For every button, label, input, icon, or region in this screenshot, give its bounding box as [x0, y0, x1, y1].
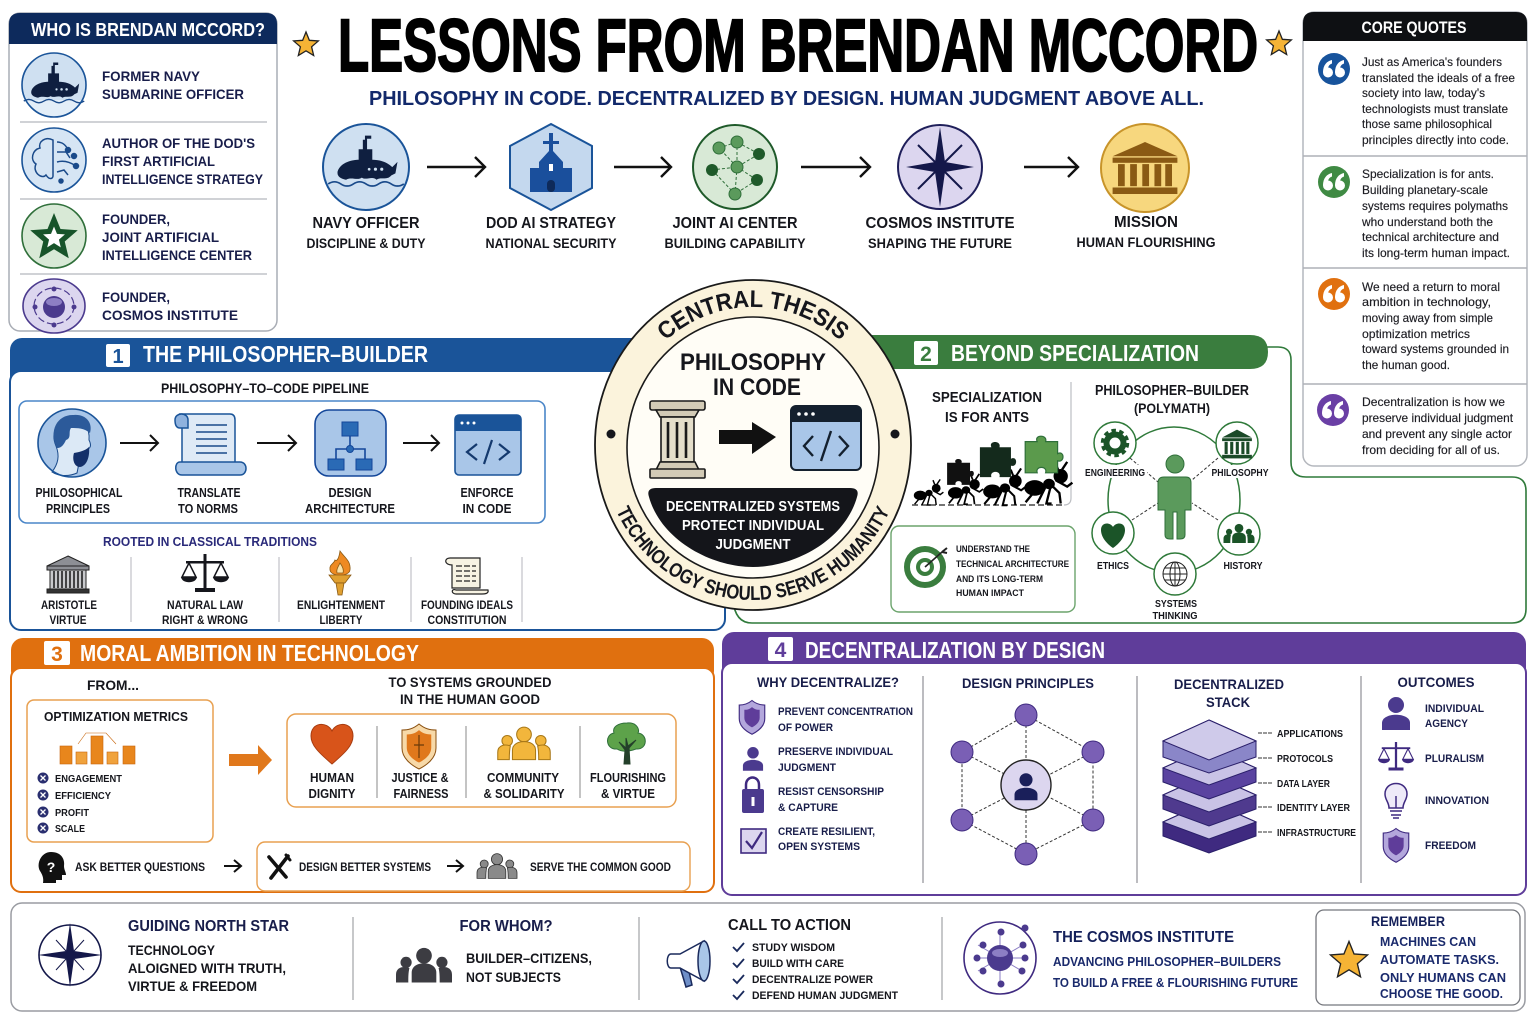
illustration: ants carrying puzzle pieces — [912, 382, 1072, 505]
panel: core quotes — [1303, 12, 1527, 466]
quote 3: the human good. — [1362, 358, 1450, 372]
text: founder JAIC: FOUNDER, — [102, 211, 170, 227]
icon: right star — [1267, 31, 1291, 55]
icon: cosmos planet — [23, 279, 85, 333]
text: preserve judgment — [778, 746, 893, 774]
heading: moral ambition: MORAL AMBITION IN TECHNOLOGY — [80, 640, 419, 666]
icon: green star — [22, 204, 86, 268]
label: cosmos institute: SHAPING THE FUTURE — [868, 235, 1012, 251]
column: design principles — [951, 675, 1104, 865]
badge 3 — [44, 641, 70, 666]
text: author of the DoD's strategy: AUTHOR OF THE DOD'S — [102, 135, 255, 151]
callout: remember — [1316, 910, 1520, 1005]
icon: cosmos institute — [964, 922, 1036, 994]
text: guiding north star: GUIDING NORTH STAR — [128, 918, 289, 935]
label: mission — [1076, 214, 1216, 250]
quote 1: those same philosophical — [1362, 117, 1492, 131]
list: metrics: SCALE — [55, 823, 85, 835]
icon: shield — [402, 724, 436, 769]
text: founder JAIC — [102, 211, 252, 263]
label: joint AI center: BUILDING CAPABILITY — [664, 235, 806, 251]
labels: values: COMMUNITY — [487, 771, 560, 785]
callout: remember: CHOOSE THE GOOD. — [1380, 986, 1503, 1001]
icon: people — [477, 854, 517, 878]
arrow — [614, 157, 671, 177]
badge 3: 3 — [51, 643, 63, 666]
text: to systems grounded: TO SYSTEMS GROUNDED — [388, 674, 552, 690]
text: create resilient — [778, 826, 875, 853]
label: enforce in code — [460, 486, 514, 516]
text: author of the DoD's strategy: INTELLIGENCE STRATEGY — [102, 171, 264, 187]
column: outcomes — [1378, 674, 1489, 862]
labels: values: FAIRNESS — [394, 787, 448, 801]
banner: decentralized systems: DECENTRALIZED SYSTEMS — [666, 498, 840, 515]
box: optimization metrics — [27, 700, 213, 842]
label: translate to norms — [178, 486, 240, 516]
flow box: design and serve: DESIGN BETTER SYSTEMS — [299, 862, 431, 874]
panel 3: moral ambition in technology — [11, 638, 714, 892]
label: navy officer: DISCIPLINE & DUTY — [306, 235, 426, 251]
callout: remember: REMEMBER — [1371, 913, 1445, 929]
icon: column — [650, 401, 705, 478]
text: call to action: DEFEND HUMAN JUDGMENT — [752, 990, 898, 1002]
icon: navy officer — [323, 124, 409, 210]
icon: megaphone — [667, 941, 710, 987]
text: from: FROM... — [87, 677, 139, 693]
column: design principles: DESIGN PRINCIPLES — [962, 675, 1094, 691]
callout: remember: AUTOMATE TASKS. — [1380, 952, 1499, 967]
central thesis medallion — [594, 279, 912, 611]
icon: community — [498, 727, 550, 760]
text: builder citizens — [466, 950, 592, 985]
icon: heart — [311, 724, 353, 764]
label: philosophical principles: PRINCIPLES — [46, 502, 110, 516]
icon: freedom shield — [1383, 828, 1409, 862]
icon: mission temple — [1101, 124, 1189, 212]
quote 1: Just as America's founders — [1362, 55, 1502, 69]
timeline: career journey — [306, 124, 1216, 251]
label: DoD AI strategy — [486, 215, 617, 251]
subheading: pipeline: PHILOSOPHY–TO–CODE PIPELINE — [161, 380, 369, 396]
arrow — [427, 157, 485, 177]
icon: founding scroll — [446, 558, 488, 594]
text: preserve judgment: PRESERVE INDIVIDUAL — [778, 746, 893, 758]
text: founder Cosmos Institute: COSMOS INSTITUTE — [102, 307, 238, 323]
icon: star — [1330, 942, 1368, 977]
quote 2: systems requires polymaths — [1362, 199, 1508, 213]
pipeline box — [19, 401, 545, 523]
node: history — [1218, 513, 1263, 572]
text: understand the architecture: AND ITS LONG-TERM — [956, 574, 1043, 585]
labels: stack layers: APPLICATIONS — [1277, 729, 1343, 740]
text: prevent concentration: PREVENT CONCENTRATION — [778, 706, 913, 718]
labels: values — [308, 771, 666, 801]
banner: decentralized systems: PROTECT INDIVIDUAL — [682, 517, 824, 534]
label: cosmos institute: COSMOS INSTITUTE — [866, 215, 1015, 232]
icon: target — [907, 548, 947, 585]
banner: decentralized systems — [648, 488, 858, 567]
icon: tools — [269, 855, 290, 878]
label: navy officer — [306, 215, 426, 251]
icon: tree — [608, 723, 645, 764]
quote 3: moving away from simple — [1362, 311, 1493, 325]
quote 2: Building planetary-scale — [1362, 183, 1488, 197]
label: DoD AI strategy: DOD AI STRATEGY — [486, 215, 616, 232]
labels: values: JUSTICE & — [392, 771, 448, 785]
heading: who is Brendan McCord: WHO IS BRENDAN MCCORD? — [31, 20, 265, 40]
heading: philosopher-builder polymath: PHILOSOPHER–BUILDER — [1095, 383, 1249, 399]
labels: stack layers — [1258, 729, 1356, 839]
text: resist censorship: RESIST CENSORSHIP — [778, 786, 884, 798]
text: the cosmos institute: TO BUILD A FREE & FLOURISHING FUTURE — [1053, 975, 1298, 990]
label: Aristotle: VIRTUE — [50, 613, 86, 627]
text: call to action: BUILD WITH CARE — [752, 958, 844, 970]
diagram: network — [951, 704, 1104, 865]
badge 2: 2 — [920, 343, 932, 366]
curved heading: central thesis: CENTRAL THESIS — [658, 290, 848, 338]
text: founder JAIC: INTELLIGENCE CENTER — [102, 247, 252, 263]
text: builder citizens: BUILDER–CITIZENS, — [466, 950, 592, 966]
text: pluralism: PLURALISM — [1425, 753, 1484, 765]
text: specialization is for ants — [932, 389, 1042, 426]
text: prevent concentration: OF POWER — [778, 722, 833, 734]
label: mission: HUMAN FLOURISHING — [1076, 234, 1216, 250]
footer band — [11, 903, 1525, 1011]
label: founding ideals — [421, 598, 513, 627]
icon: people — [396, 948, 452, 983]
icon: pluralism scales — [1378, 742, 1414, 770]
text: call to action: STUDY WISDOM — [752, 942, 835, 954]
label: cosmos institute — [866, 215, 1015, 251]
label: translate to norms: TRANSLATE — [178, 486, 240, 500]
icon: left star — [294, 32, 318, 56]
text: individual agency: AGENCY — [1425, 718, 1469, 730]
badge 1 — [106, 344, 130, 368]
quote 3: ambition in technology, — [1362, 295, 1491, 309]
quote 3 — [1318, 278, 1509, 372]
text: founder Cosmos Institute: FOUNDER, — [102, 289, 170, 305]
node: engineering: ENGINEERING — [1085, 468, 1145, 479]
heading: for whom: FOR WHOM? — [460, 918, 552, 935]
quote 1: principles directly into code. — [1362, 133, 1509, 147]
text: former navy submarine officer: FORMER NAVY — [102, 68, 201, 84]
text: specialization is for ants: SPECIALIZATION — [932, 389, 1042, 406]
text: the cosmos institute: ADVANCING PHILOSOPHER–BUILDERS — [1053, 954, 1281, 969]
column: outcomes: OUTCOMES — [1398, 674, 1474, 690]
heading: core quotes: CORE QUOTES — [1362, 18, 1466, 37]
node: philosophy: PHILOSOPHY — [1212, 468, 1269, 479]
label: design architecture: ARCHITECTURE — [305, 502, 395, 516]
label: natural law: NATURAL LAW — [167, 598, 244, 612]
text: call to action — [728, 917, 898, 1002]
quote 4: and prevent any single actor — [1362, 427, 1512, 441]
label: design architecture: DESIGN — [328, 486, 372, 500]
icon: AI brain — [22, 128, 86, 192]
icon: scroll — [175, 414, 246, 475]
text: author of the DoD's strategy: FIRST ARTIFICIAL — [102, 153, 215, 169]
node: systems thinking: SYSTEMS — [1155, 599, 1197, 610]
callout: remember: ONLY HUMANS CAN — [1380, 970, 1506, 985]
badge 1: 1 — [112, 346, 124, 368]
quote 2: Specialization is for ants. — [1362, 167, 1494, 181]
quote 2: technical architecture and — [1362, 230, 1499, 244]
flow box: design and serve: SERVE THE COMMON GOOD — [530, 862, 671, 874]
text: guiding north star — [128, 918, 289, 994]
arrow — [1024, 157, 1078, 177]
icon: code window — [791, 406, 861, 470]
list: metrics: PROFIT — [55, 807, 90, 819]
column: decentralized stack: STACK — [1206, 694, 1250, 710]
labels: stack layers: PROTOCOLS — [1277, 754, 1333, 765]
icon: compass — [38, 923, 102, 987]
labels: stack layers: INFRASTRUCTURE — [1277, 828, 1356, 839]
labels: values: & SOLIDARITY — [484, 787, 565, 801]
text: specialization is for ants: IS FOR ANTS — [945, 409, 1029, 426]
diagram: polymath ring — [1083, 422, 1272, 622]
text: understand the architecture: TECHNICAL ARCHITECTURE — [956, 559, 1069, 570]
labels: values: HUMAN — [310, 771, 354, 785]
node: history: HISTORY — [1224, 561, 1263, 572]
labels: stack layers: IDENTITY LAYER — [1277, 803, 1351, 814]
icon: lock — [742, 778, 764, 813]
quote 3: toward systems grounded in — [1362, 342, 1509, 356]
text: to systems grounded — [388, 674, 552, 707]
quote 4 — [1317, 394, 1514, 457]
label: joint AI center — [664, 215, 806, 251]
text: understand the architecture: HUMAN IMPACT — [956, 588, 1024, 599]
column: why decentralize: WHY DECENTRALIZE? — [757, 674, 899, 690]
label: enforce in code: ENFORCE — [460, 486, 514, 500]
list: metrics: EFFICIENCY — [55, 790, 111, 802]
flow: ask better questions: ? — [47, 859, 55, 875]
icon: shield — [739, 700, 765, 734]
banner: decentralized systems: JUDGMENT — [716, 536, 790, 553]
node: systems thinking: THINKING — [1152, 611, 1198, 622]
text: guiding north star: TECHNOLOGY — [128, 942, 216, 958]
label: philosophical principles: PHILOSOPHICAL — [36, 486, 123, 500]
label: Aristotle — [41, 598, 97, 627]
flow: ask better questions: ASK BETTER QUESTIONS — [75, 862, 205, 874]
node: ethics — [1092, 512, 1134, 572]
panel 4: decentralization by design — [722, 632, 1526, 895]
callout: remember: MACHINES CAN — [1380, 934, 1476, 949]
quote 2: its long-term human impact. — [1362, 246, 1510, 260]
heading: philosopher-builder polymath: (POLYMATH) — [1134, 400, 1210, 416]
icon: joint AI network — [693, 125, 777, 209]
heading: decentralization by design: DECENTRALIZATION BY DESIGN — [805, 637, 1105, 663]
subtitle: PHILOSOPHY IN CODE. DECENTRALIZED BY DESIGN. HUMAN JUDGMENT ABOVE ALL. — [369, 88, 1204, 110]
label: natural law — [162, 598, 248, 627]
text: individual agency: INDIVIDUAL — [1425, 703, 1484, 715]
heading: philosophy in code: IN CODE — [713, 374, 801, 401]
bar chart — [60, 733, 135, 764]
text: understand the architecture — [956, 544, 1069, 599]
text: preserve judgment: JUDGMENT — [778, 762, 836, 774]
text: individual agency — [1425, 703, 1484, 730]
diagram: layered stack — [1163, 720, 1256, 853]
node: philosophy — [1212, 422, 1269, 479]
text: to systems grounded: IN THE HUMAN GOOD — [400, 691, 540, 707]
column: decentralized stack: DECENTRALIZED — [1174, 676, 1284, 692]
icon: temple — [47, 556, 89, 593]
label: mission: MISSION — [1114, 214, 1178, 231]
label: natural law: RIGHT & WRONG — [162, 613, 248, 627]
label: founding ideals: FOUNDING IDEALS — [421, 598, 513, 612]
label: navy officer: NAVY OFFICER — [312, 215, 420, 232]
arrow — [120, 435, 158, 451]
text: guiding north star: VIRTUE & FREEDOM — [128, 978, 257, 994]
text: call to action: DECENTRALIZE POWER — [752, 974, 873, 986]
quote 2 — [1318, 166, 1510, 260]
labels: stack layers: DATA LAYER — [1277, 779, 1331, 790]
labels: values: & VIRTUE — [601, 787, 655, 801]
heading: beyond specialization: BEYOND SPECIALIZATION — [951, 340, 1199, 366]
heading: the philosopher-builder: THE PHILOSOPHER–BUILDER — [143, 341, 428, 367]
text: prevent concentration — [778, 706, 913, 734]
label: enlightenment — [297, 598, 386, 627]
text: author of the DoD's strategy — [102, 135, 264, 187]
text: resist censorship — [778, 786, 884, 814]
icon: innovation bulb — [1385, 784, 1407, 818]
quote 3: We need a return to moral — [1362, 280, 1500, 294]
text: create resilient: CREATE RESILIENT, — [778, 826, 875, 838]
panel 2: beyond specialization — [726, 335, 1526, 623]
text: former navy submarine officer — [102, 68, 244, 102]
text: guiding north star: ALOIGNED WITH TRUTH, — [128, 960, 286, 976]
quote 4: preserve individual judgment — [1362, 411, 1514, 425]
icon: person — [743, 747, 763, 771]
label: founding ideals: CONSTITUTION — [428, 613, 506, 627]
column: decentralized stack — [1163, 676, 1356, 853]
panel: who is Brendan McCord — [9, 13, 277, 333]
callout: technical architecture — [891, 526, 1075, 612]
label: Aristotle: ARISTOTLE — [41, 598, 97, 612]
flow box: design and serve — [257, 842, 690, 891]
text: builder citizens: NOT SUBJECTS — [466, 969, 561, 985]
label: enlightenment: LIBERTY — [320, 613, 362, 627]
arrow — [801, 157, 870, 177]
label: enforce in code: IN CODE — [462, 502, 512, 516]
node: engineering — [1085, 422, 1145, 479]
quote 2: who understand both the — [1361, 215, 1493, 229]
label: translate to norms: TO NORMS — [178, 502, 238, 516]
node: ethics: ETHICS — [1097, 561, 1129, 572]
label: design architecture — [305, 486, 395, 516]
text: founder JAIC: JOINT ARTIFICIAL — [102, 229, 219, 245]
text: former navy submarine officer: SUBMARINE OFFICER — [102, 86, 244, 102]
quote 1: translated the ideals of a free — [1362, 71, 1515, 85]
box: human good values — [287, 714, 676, 807]
icon: torch — [329, 551, 351, 595]
label: philosophical principles — [36, 486, 123, 516]
column: why decentralize — [739, 674, 913, 853]
text: founder Cosmos Institute — [102, 289, 238, 323]
heading: philosopher-builder polymath — [1095, 383, 1249, 416]
text: create resilient: OPEN SYSTEMS — [778, 841, 860, 853]
quote 1 — [1318, 53, 1515, 147]
arrow — [403, 435, 439, 451]
icon: architecture diagram — [315, 410, 386, 476]
text: resist censorship: & CAPTURE — [778, 802, 838, 814]
labels: values: DIGNITY — [308, 787, 356, 801]
heading: philosophy in code — [680, 349, 826, 401]
node: systems thinking — [1152, 553, 1198, 622]
arrow — [257, 435, 296, 451]
text: the cosmos institute: THE COSMOS INSTITUTE — [1053, 929, 1234, 946]
icon: DoD hexagon — [510, 124, 592, 210]
text: freedom: FREEDOM — [1425, 840, 1476, 852]
quote 3: optimization metrics — [1362, 327, 1470, 341]
panel 1: the philosopher-builder — [10, 338, 725, 630]
text: innovation: INNOVATION — [1425, 795, 1489, 807]
text: the cosmos institute — [1053, 929, 1298, 990]
badge 2 — [914, 341, 938, 366]
arrow: philosophy to code — [719, 422, 776, 454]
icon: compass star — [898, 125, 982, 209]
label: joint AI center: JOINT AI CENTER — [672, 215, 798, 232]
icon: submarine — [22, 53, 86, 117]
labels: values: FLOURISHING — [590, 771, 666, 785]
list: metrics — [38, 772, 123, 835]
list: metrics: ENGAGEMENT — [55, 773, 123, 785]
box: optimization metrics: OPTIMIZATION METRICS — [44, 709, 188, 724]
flow: ask better questions — [39, 852, 241, 883]
icon: person — [1158, 455, 1191, 539]
text: understand the architecture: UNDERSTAND THE — [956, 544, 1030, 555]
label: enlightenment: ENLIGHTENMENT — [297, 598, 386, 612]
quote 4: Decentralization is how we — [1362, 395, 1505, 409]
icon: checkbox — [741, 829, 766, 853]
arrow: from to — [229, 745, 272, 775]
icon: individual agency — [1382, 697, 1410, 730]
icon: scales — [181, 554, 229, 592]
quote 4: from deciding for all of us. — [1362, 443, 1500, 457]
curved text: technology should serve humanity: TECHNOLOGY SHOULD SERVE HUMANITY — [618, 504, 888, 600]
badge 4 — [768, 637, 793, 662]
heading: philosophy in code: PHILOSOPHY — [680, 349, 826, 376]
quote 1: society into law, today's — [1362, 86, 1485, 100]
label: DoD AI strategy: NATIONAL SECURITY — [486, 235, 617, 251]
icon: code window — [455, 415, 521, 475]
subheading: classical traditions: ROOTED IN CLASSICAL TRADITIONS — [103, 534, 317, 549]
icon: philosopher head — [38, 409, 106, 477]
badge 4: 4 — [775, 639, 787, 662]
text: call to action: CALL TO ACTION — [728, 917, 851, 934]
quote 1: technologists must translate — [1362, 102, 1508, 116]
